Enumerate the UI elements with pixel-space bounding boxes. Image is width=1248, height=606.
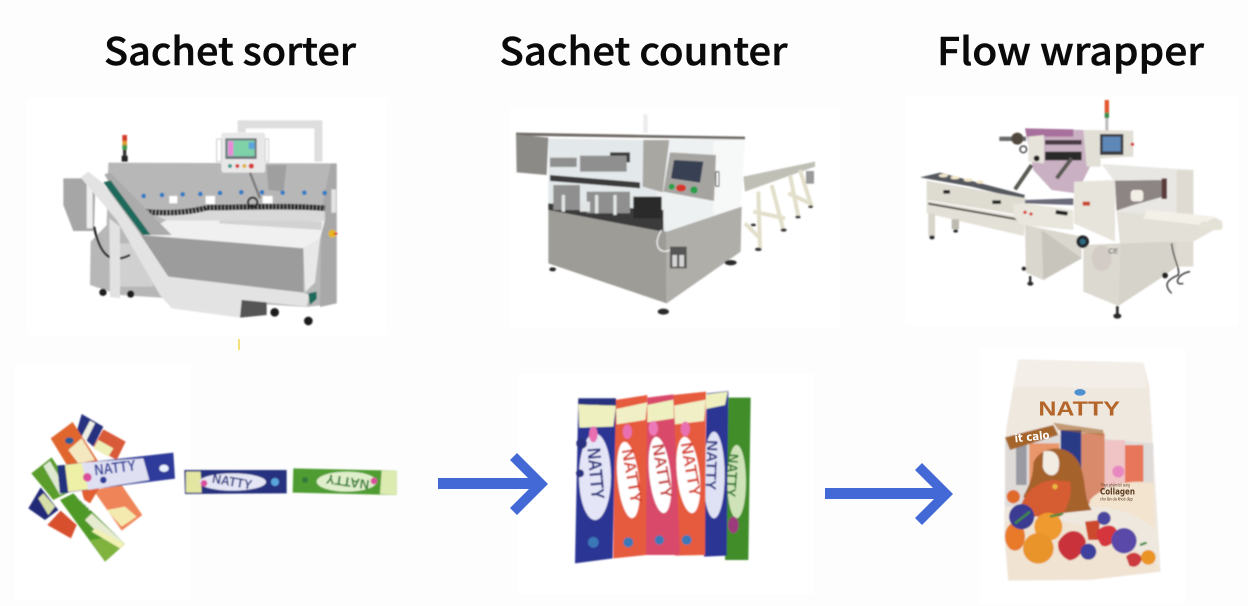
panel: flow wrapper machine photo: [905, 95, 1238, 326]
sachet 6 green: NATTY: [721, 453, 740, 498]
panel: sachet sorter machine photo: [27, 98, 387, 335]
label it calo: it calo: [1014, 428, 1050, 445]
heading: Sachet sorter: Sachet sorter: [104, 21, 356, 76]
sachet: green single: [293, 468, 397, 495]
label cho lan da khoe dep: cho làn da khoẻ đẹp: [1100, 497, 1133, 502]
panel: sachet counter machine photo: [510, 108, 840, 328]
sachet 5 blue: NATTY: [702, 440, 719, 491]
sachet 2 red: [613, 395, 647, 558]
sachet 2 red: NATTY: [618, 447, 646, 505]
label Collagen: Collagen: [1100, 488, 1135, 498]
label Thuc pham bo sung: Thực phẩm bổ sung: [1101, 483, 1130, 488]
sachet 4 red: [673, 392, 706, 556]
panel: packed bag: [980, 347, 1185, 605]
heading: Flow wrapper: Flow wrapper: [937, 21, 1204, 76]
sachet 3 pink: [643, 394, 680, 555]
arrow: to flow wrapper: [825, 463, 953, 525]
sachet 1 blue: [575, 398, 616, 563]
heading: Sachet counter: Sachet counter: [500, 21, 788, 76]
panel: loose sachets: NATTY: [75, 495, 93, 513]
panel: flow wrapper machine photo: CE: [1108, 246, 1119, 255]
logo badge: [1074, 389, 1086, 396]
sachet: blue single: [184, 470, 287, 494]
sachet 3 pink: NATTY: [648, 442, 676, 500]
panel: loose sachets: [15, 365, 191, 600]
small yellow mark: [238, 339, 240, 350]
sachet: green single: NATTY: [325, 471, 370, 492]
sachet 6 green: [721, 398, 751, 560]
sachet 1 blue: NATTY: [583, 447, 609, 501]
sachet 4 red: NATTY: [677, 441, 705, 498]
logo NATTY: NATTY: [1038, 398, 1120, 421]
panel: counted sachet row: [518, 374, 813, 594]
sachet 5 blue: [702, 391, 728, 557]
arrow: to sachet counter: [438, 453, 548, 515]
panel: loose sachets: NATTY: [93, 457, 137, 479]
sachet: blue single: NATTY: [211, 471, 253, 493]
